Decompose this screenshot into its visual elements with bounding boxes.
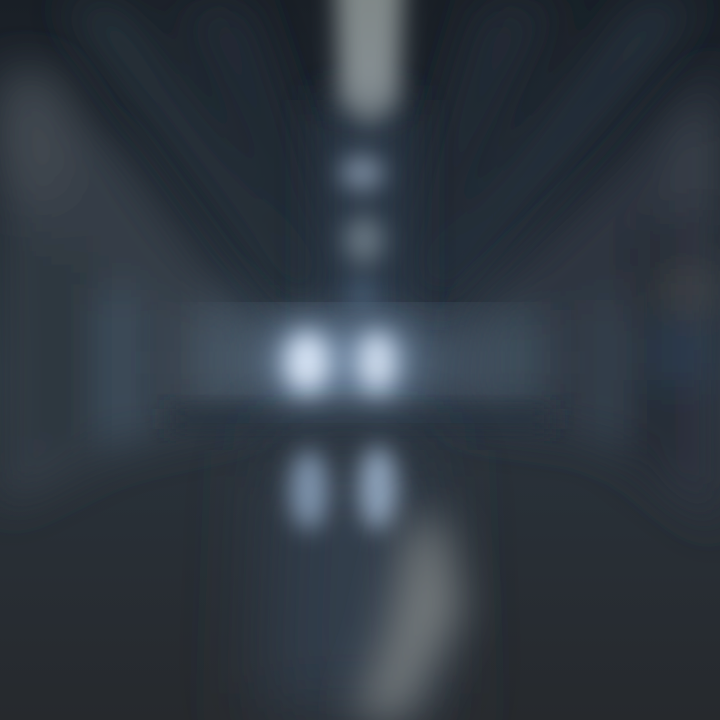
- left wall: [0, 60, 260, 510]
- floor light streak: [355, 520, 462, 720]
- horizon glow: [215, 335, 505, 390]
- twin bright lights: [273, 322, 409, 402]
- twin light reflections: [290, 446, 397, 530]
- distant ceiling lights: [340, 155, 384, 313]
- ceiling light shaft: [335, 0, 404, 128]
- right wall: [450, 60, 720, 530]
- center ceiling column: [320, 100, 410, 330]
- ceiling beams: [60, 0, 700, 310]
- dark band below horizon: [170, 408, 550, 430]
- floor tone: [260, 450, 440, 720]
